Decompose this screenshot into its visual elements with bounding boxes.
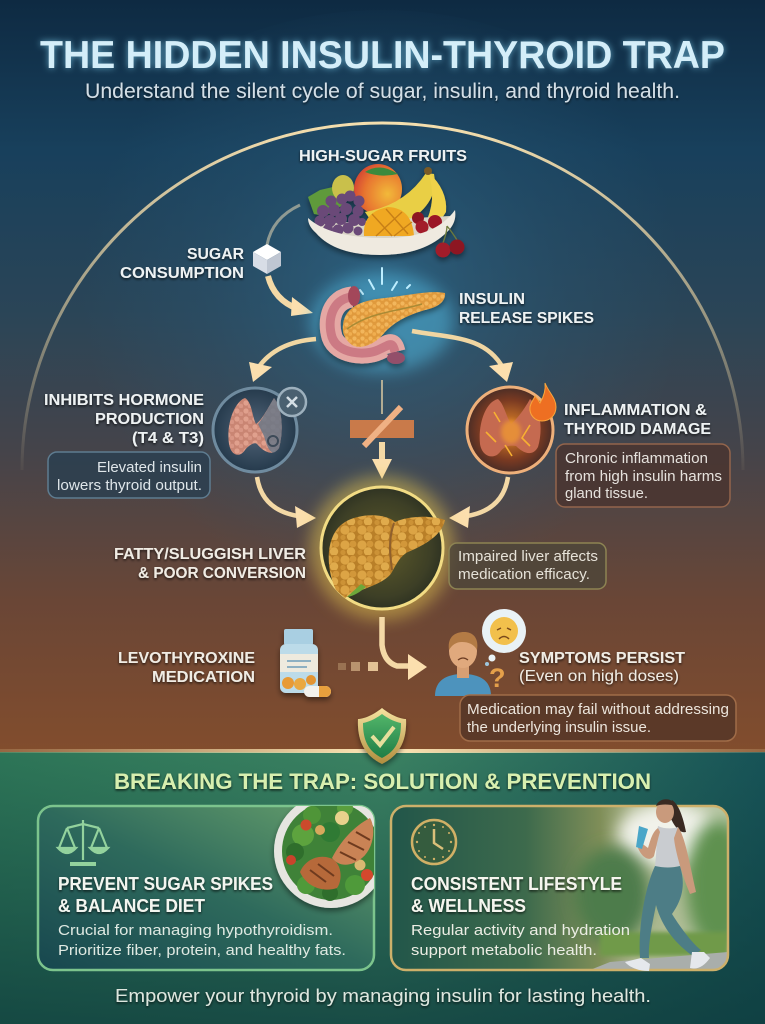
label: levothyroxine medication: LEVOTHYROXINE <box>118 650 255 667</box>
panel: consistent lifestyle <box>391 799 750 971</box>
background: blue to brown gradient <box>0 0 765 752</box>
divider glow <box>0 749 765 753</box>
arch framing the cycle <box>22 123 743 470</box>
sugar consumption group <box>120 205 313 316</box>
callout: chronic inflammation: gland tissue. <box>565 485 648 502</box>
icon: fruit bowl <box>308 164 464 258</box>
body text: Regular activity and hydration <box>411 923 630 939</box>
label: insulin release spikes: RELEASE SPIKES <box>459 310 594 327</box>
glow around liver <box>310 476 454 620</box>
label: high-sugar fruits: HIGH-SUGAR FRUITS <box>299 148 467 165</box>
heading: & WELLNESS <box>411 896 526 916</box>
icon: sugar cube <box>253 244 281 274</box>
heading: & BALANCE DIET <box>58 896 205 916</box>
callout: impaired liver: Impaired liver affects <box>458 548 598 565</box>
image: woman walking with water bottle <box>625 799 710 971</box>
body text: support metabolic health. <box>411 943 597 959</box>
callout: elevated insulin <box>48 452 210 498</box>
panel: prevent sugar spikes <box>38 794 388 970</box>
arrow: pancreas to inhibited thyroid <box>249 339 316 382</box>
label: sugar consumption: SUGAR <box>187 246 244 263</box>
label: levothyroxine medication: MEDICATION <box>152 669 255 686</box>
callout: medication may fail: Medication may fail without addressing <box>467 701 729 718</box>
icon: thyroid with inhibited mark <box>213 388 297 472</box>
label: fatty sluggish liver: & POOR CONVERSION <box>138 565 306 582</box>
image: park background <box>571 807 727 969</box>
right branch: inflammation and thyroid damage <box>467 383 730 507</box>
image: salad plate <box>271 806 374 914</box>
frame <box>391 806 728 970</box>
sparks <box>360 268 410 294</box>
heading: breaking the trap: BREAKING THE TRAP: SOLUTION & PREVENTION <box>114 769 651 794</box>
left branch: inhibits hormone production <box>44 388 306 498</box>
medication section <box>118 617 427 697</box>
icon: thought bubble with sad face <box>482 609 526 666</box>
body text: Prioritize fiber, protein, and healthy fats. <box>58 943 346 959</box>
arrow: dashed medication path <box>338 662 378 671</box>
callout: chronic inflammation: from high insulin harms <box>565 468 722 485</box>
arrow: pancreas to inflamed thyroid <box>412 331 513 382</box>
footer tagline: Empower your thyroid by managing insulin for lasting health. <box>115 985 651 1006</box>
callout: elevated insulin: Elevated insulin <box>97 459 202 476</box>
central blocked pathway <box>350 380 414 479</box>
icon: balance scales <box>58 820 108 864</box>
glow behind pancreas <box>310 272 454 372</box>
callout: chronic inflammation <box>556 444 730 507</box>
heading: symptoms persist: SYMPTOMS PERSIST <box>519 650 685 667</box>
icon: flame <box>530 383 556 421</box>
heading: CONSISTENT LIFESTYLE <box>411 874 622 894</box>
heading: inhibits hormone production: (T4 & T3) <box>132 430 204 447</box>
title: THE HIDDEN INSULIN-THYROID TRAP <box>40 34 725 77</box>
callout: medication may fail: the underlying insulin issue. <box>467 719 651 736</box>
body text: Crucial for managing hypothyroidism. <box>58 923 333 939</box>
label: insulin release spikes: INSULIN <box>459 291 525 308</box>
icon: concerned person <box>435 632 491 696</box>
arrow: inhibited thyroid to liver <box>257 477 316 528</box>
pancreas with insulin spike <box>310 268 594 372</box>
fruit group <box>299 148 467 258</box>
label: sugar consumption: CONSUMPTION <box>120 265 244 282</box>
callout: chronic inflammation: Chronic inflammation <box>565 450 708 467</box>
icon: pancreas <box>330 286 445 364</box>
icon: inflamed thyroid <box>467 387 553 473</box>
heading: PREVENT SUGAR SPIKES <box>58 874 273 894</box>
heading: inhibits hormone production: PRODUCTION <box>95 411 204 428</box>
solution section background <box>0 752 765 1024</box>
arrow: down to liver <box>372 442 392 479</box>
arrow: liver to symptoms <box>382 617 427 680</box>
dome interior glow <box>42 10 722 590</box>
callout: elevated insulin: lowers thyroid output. <box>57 477 202 494</box>
heading: inhibits hormone production: INHIBITS HORMONE <box>44 392 204 409</box>
arrow: sugar to pancreas <box>268 276 313 316</box>
heading: inflammation and thyroid damage: THYROID DAMAGE <box>564 421 711 438</box>
icon: x badge <box>278 388 306 416</box>
icon: pill bottle <box>280 629 331 697</box>
subtitle: Understand the silent cycle of sugar, insulin, and thyroid health. <box>85 80 680 103</box>
icon: fatty liver <box>321 487 445 609</box>
icon: clock <box>412 820 456 864</box>
callout: medication may fail <box>460 695 736 741</box>
icon: question mark: ? <box>489 663 506 693</box>
arrow: inflamed thyroid to liver <box>449 477 508 528</box>
callout: impaired liver: medication efficacy. <box>458 566 590 583</box>
heading: symptoms persist: (Even on high doses) <box>519 668 679 685</box>
symptoms section <box>435 609 736 741</box>
heading: inflammation and thyroid damage: INFLAMMATION & <box>564 402 707 419</box>
arrow: fruit to sugar <box>267 205 300 245</box>
label: fatty sluggish liver: FATTY/SLUGGISH LIVER <box>114 546 306 563</box>
icon: blocked bar with slash <box>350 407 414 446</box>
callout: impaired liver <box>449 543 606 589</box>
icon: shield with check <box>358 708 406 764</box>
liver section <box>114 476 606 620</box>
